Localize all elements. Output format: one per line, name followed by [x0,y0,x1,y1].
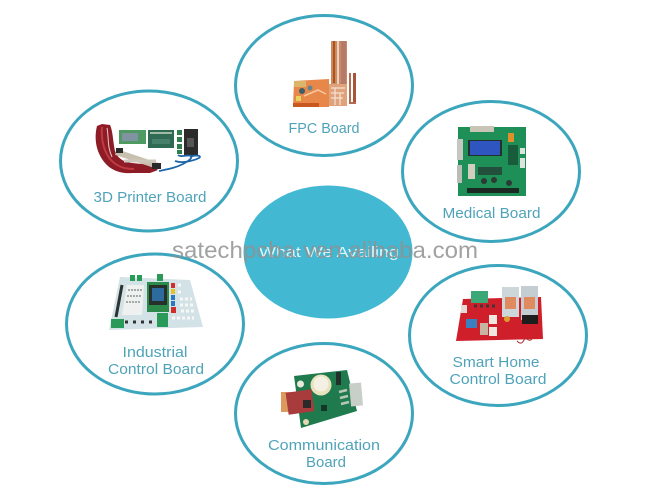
label: 3D Printer Board: 3D Printer Board [94,189,206,206]
center heading: What We Availing [259,244,399,261]
label: Smart Home Control Board: Smart Home [452,354,540,371]
label: Industrial Control Board: Control Board [108,361,204,378]
label: Communication Board: Communication [268,437,380,454]
label: Communication Board: Board [306,454,346,471]
label: FPC Board: FPC Board [288,120,360,137]
icon: smart home control board [456,286,543,343]
label: Communication Board [268,437,380,471]
panel: Smart home control board [410,266,586,406]
icon: 3D printer board kit [96,124,200,173]
icon: industrial control board [109,274,203,330]
watermark: satechpcba·ven.alibaba.com [172,237,478,263]
label: Industrial Control Board [108,344,204,378]
label: Industrial Control Board: Industrial [122,344,188,361]
panel: FPC board [236,16,412,156]
icon: communication board [281,370,363,428]
center ellipse [244,186,412,318]
panel: Medical board [402,102,580,242]
panel: 3D printer board [60,91,238,231]
label: Smart Home Control Board: Control Board [450,371,546,388]
label: Medical Board: Medical Board [442,205,540,222]
icon: medical board [457,126,526,196]
label: Smart Home Control Board [450,354,546,388]
panel: Communication board [236,344,412,484]
icon: FPC board [293,41,356,107]
panel: Industrial control board [66,254,244,394]
